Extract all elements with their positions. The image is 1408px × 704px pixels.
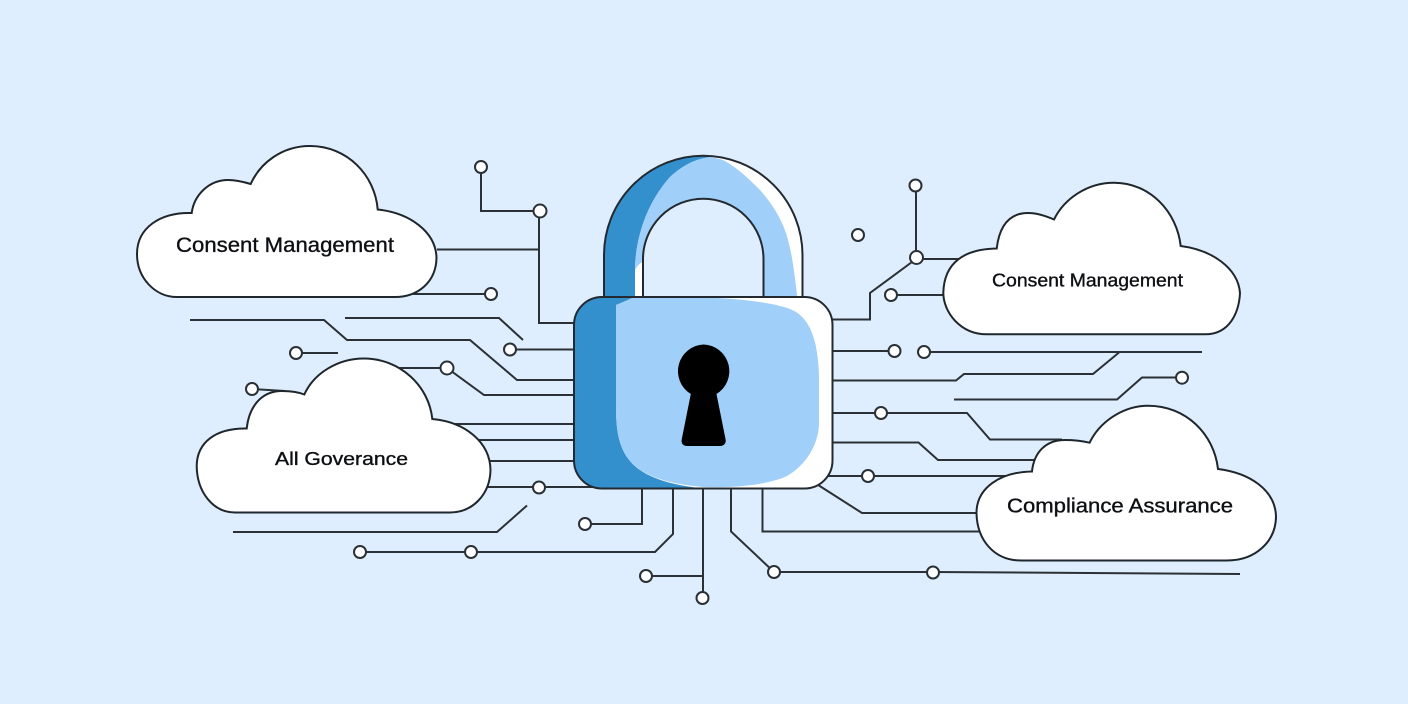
padlock [574,156,832,488]
label: Compliance Assurance: Compliance Assurance [1007,496,1233,518]
circuit traces: upper left [190,167,575,380]
padlock shackle [604,156,802,298]
circuit traces: bottom [360,483,1240,598]
circuit traces: lower left [233,368,610,532]
circuit traces: right [825,185,1202,476]
label: All Goverance: All Goverance [275,449,408,469]
circuit nodes: left side [246,161,546,494]
cloud: Consent Management (top left) [137,146,436,297]
padlock body [574,297,832,488]
cloud: All Goverance (lower left) [197,358,490,512]
cloud: Consent Management (top right) [943,183,1240,334]
icon: keyhole [678,344,729,446]
circuit nodes: right side [852,180,1188,482]
label: Consent Management: Consent Management [992,270,1183,290]
circuit nodes: bottom [354,518,939,604]
label: Consent Management: Consent Management [176,234,394,257]
cloud: Compliance Assurance (lower right) [976,406,1276,560]
